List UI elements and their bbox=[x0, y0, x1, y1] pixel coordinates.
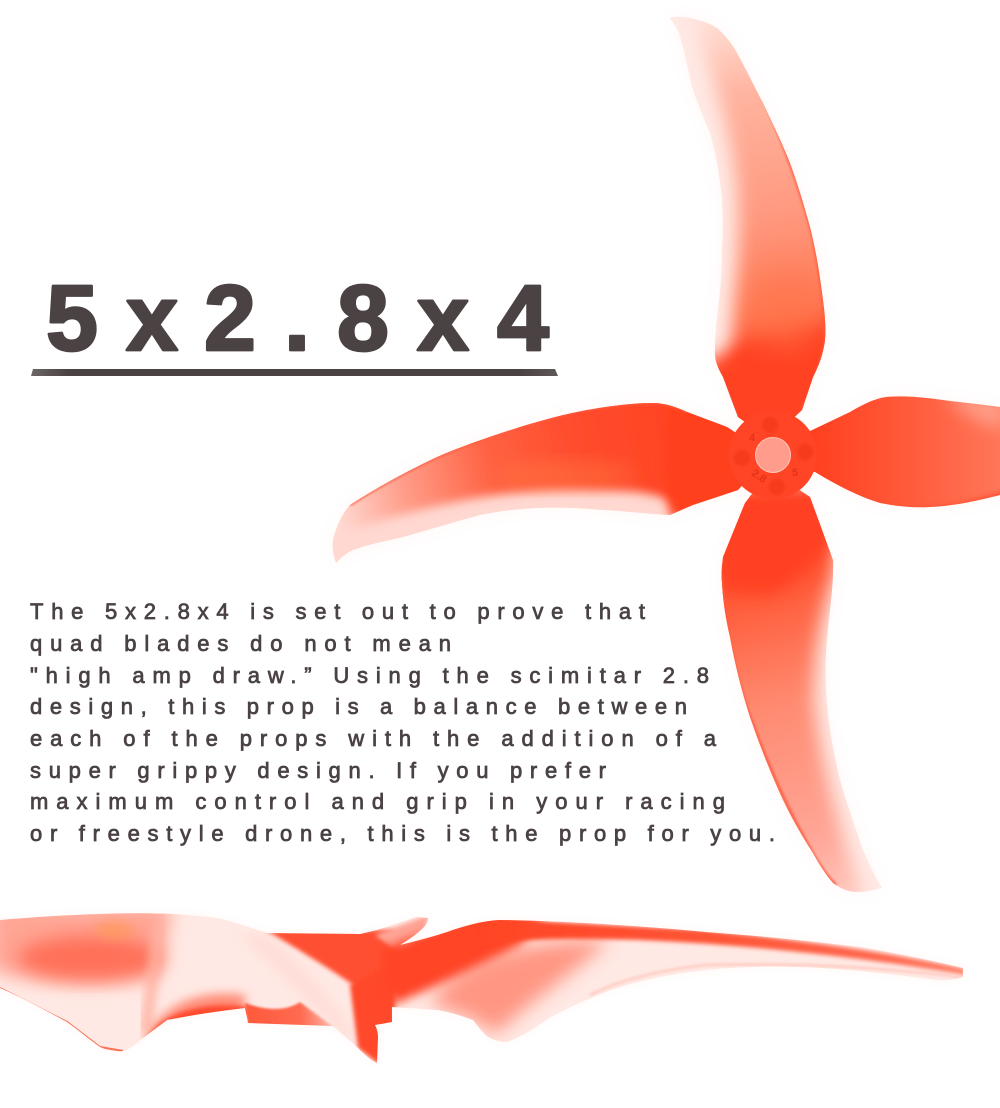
title: x bbox=[417, 266, 469, 370]
hub markings: 2.8 bbox=[749, 467, 768, 486]
description text: maximum control and grip in your racing bbox=[30, 789, 725, 814]
soft glow around propeller bbox=[333, 17, 1000, 892]
description text: super grippy design. If you prefer bbox=[30, 758, 606, 783]
blade: left bbox=[332, 403, 742, 563]
blade: top bbox=[669, 17, 826, 422]
right blade colour bbox=[430, 940, 610, 1035]
hub markings: 4 bbox=[749, 432, 756, 444]
hub bbox=[729, 411, 817, 499]
blade: bottom bbox=[722, 490, 882, 892]
title: 2 bbox=[204, 266, 256, 370]
propeller: side view bbox=[0, 913, 963, 1063]
left blade colour bbox=[0, 905, 172, 984]
description text: design, this prop is a balance between bbox=[30, 694, 687, 719]
title underline bbox=[31, 369, 558, 376]
title: . bbox=[284, 266, 310, 370]
blade: right bbox=[810, 396, 1000, 508]
hub colour bbox=[264, 926, 398, 992]
title: 4 bbox=[497, 266, 549, 370]
title: x bbox=[126, 266, 178, 370]
description text: each of the props with the addition of a bbox=[30, 726, 717, 751]
title: 5 bbox=[46, 266, 98, 370]
description text: quad blades do not mean bbox=[30, 631, 451, 656]
center hole bbox=[756, 438, 790, 472]
icon: screw holes bbox=[734, 417, 813, 495]
hub markings: 5 bbox=[792, 467, 798, 479]
description text: or freestyle drone, this is the prop for you. bbox=[30, 821, 775, 846]
hub markings bbox=[749, 432, 798, 486]
propeller: top view bbox=[320, 0, 1000, 900]
description text bbox=[30, 599, 775, 846]
title bbox=[46, 266, 549, 370]
description text: The 5x2.8x4 is set out to prove that bbox=[30, 599, 645, 624]
title: 8 bbox=[337, 266, 389, 370]
description text: "high amp draw.” Using the scimitar 2.8 bbox=[30, 663, 709, 688]
